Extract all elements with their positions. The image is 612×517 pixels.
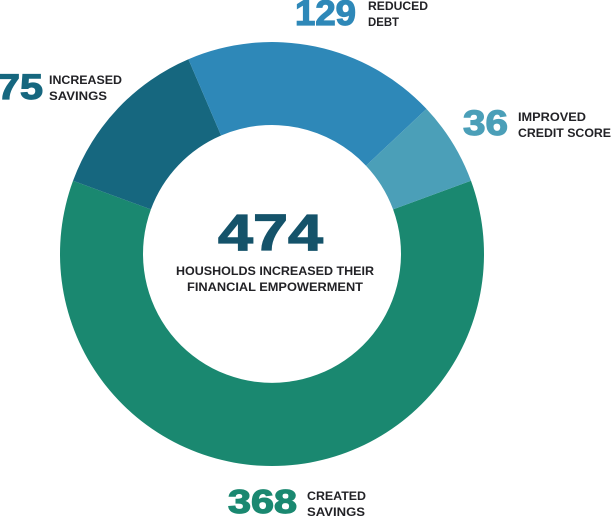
label: improved credit score [463,104,611,143]
label: improved credit score: CREDIT SCORE [518,126,611,140]
total number: 474 [218,204,324,261]
segment: created savings 368 [60,181,484,466]
segment: reduced debt 129 [188,42,426,166]
label: increased savings [0,68,122,107]
center caption [176,264,374,294]
donut chart [60,42,484,466]
label: created savings: CREATED [307,489,366,503]
segment: improved credit score 36 [366,109,471,209]
center caption: FINANCIAL EMPOWERMENT [187,280,364,294]
center caption: HOUSHOLDS INCREASED THEIR [176,264,374,278]
label: improved credit score: 36 [463,104,508,143]
segment: increased savings 75 [73,59,221,209]
label: increased savings: SAVINGS [49,89,107,103]
label: reduced debt [295,0,428,33]
label: created savings [228,483,366,517]
label: reduced debt: DEBT [368,15,400,29]
center total [176,204,374,294]
label: increased savings: INCREASED [49,73,122,87]
label: improved credit score: IMPROVED [518,110,586,124]
